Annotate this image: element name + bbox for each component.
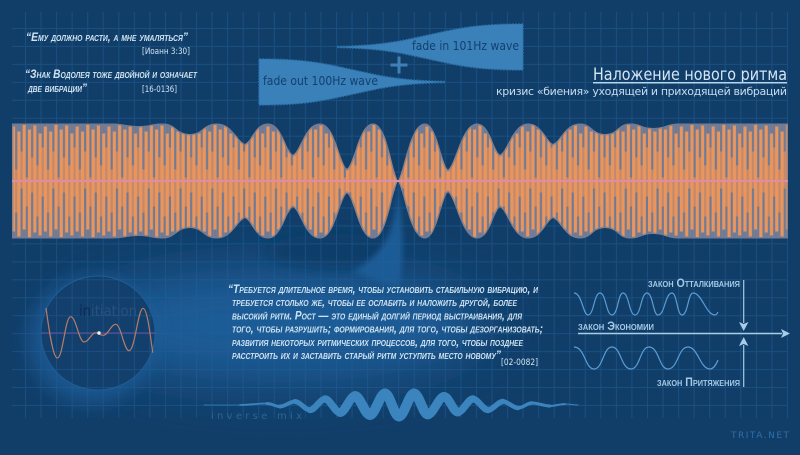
main quote paragraph: расстроить их и заставить старый ритм уступить место новому”: [232, 348, 501, 362]
label: fade out: fade out 100Hz wave: [263, 74, 378, 88]
credit: TRITA.NET: [730, 431, 790, 441]
label: law of attraction: закон Притяжения: [657, 377, 740, 389]
quote: John: “Ему должно расти, а мне умаляться”: [26, 30, 188, 44]
initiation circle disc: [41, 276, 155, 390]
axis arrow: [578, 332, 782, 334]
top arrowhead: [739, 322, 748, 331]
wave: [46, 308, 153, 358]
marker dot: [97, 331, 101, 335]
reference: John: [Иоанн 3:30]: [142, 47, 190, 57]
wave: lower frequency: [574, 347, 718, 369]
main quote paragraph: [228, 282, 543, 368]
main quote paragraph: того, чтобы разрушить; формирования, для того, чтобы дезорганизовать;: [232, 322, 543, 336]
label: law of economy: закон Экономии: [578, 321, 654, 333]
title underline: [593, 82, 787, 84]
reference: 16-0136: [16-0136]: [142, 85, 177, 95]
centre line: [12, 180, 788, 182]
plus sign: [390, 56, 408, 74]
laws diagram: [574, 278, 790, 389]
fade out wave: [259, 59, 445, 105]
inverse mix wave: [204, 394, 578, 416]
main quote paragraph: “Требуется длительное время, чтобы установить стабильную вибрацию, и: [228, 282, 538, 296]
title block: [496, 65, 787, 98]
quote: Aquarius line 1: “Знак Водолея тоже двойной и означает: [25, 67, 198, 81]
label: inverse mix: inverse mix: [211, 411, 302, 422]
main quote paragraph: требуется столько же, чтобы ее ослабить и наложить другой, более: [232, 295, 518, 309]
label: fade in: fade in 101Hz wave: [412, 39, 519, 53]
bottom arrowhead: [739, 337, 748, 346]
quotes top left: [25, 30, 198, 95]
bottom arrow: [743, 345, 745, 387]
initiation diagram: [41, 302, 156, 358]
label: law of repulsion: закон Отталкивания: [648, 278, 740, 290]
top arrow: [743, 280, 745, 323]
wave: higher frequency: [574, 293, 718, 315]
reference: 02-0082: [02-0082]: [501, 358, 538, 368]
axis arrowhead: [781, 329, 790, 338]
glow behind lower panels: [28, 185, 485, 404]
main quote paragraph: развития некоторых ритмических процессов, для того, чтобы позднее: [232, 335, 524, 349]
fade in wave: [337, 24, 523, 70]
subtitle: кризис «биения» уходящей и приходящей вибраций: [496, 85, 787, 98]
quote: Aquarius line 2: две вибрации”: [27, 81, 87, 95]
main quote paragraph: высокий ритм. Рост — это единый долгий период выстраивания, для: [232, 308, 522, 322]
axis: [41, 332, 156, 334]
label: initiation: initiation: [79, 302, 137, 320]
main beat waveform: [12, 123, 788, 239]
